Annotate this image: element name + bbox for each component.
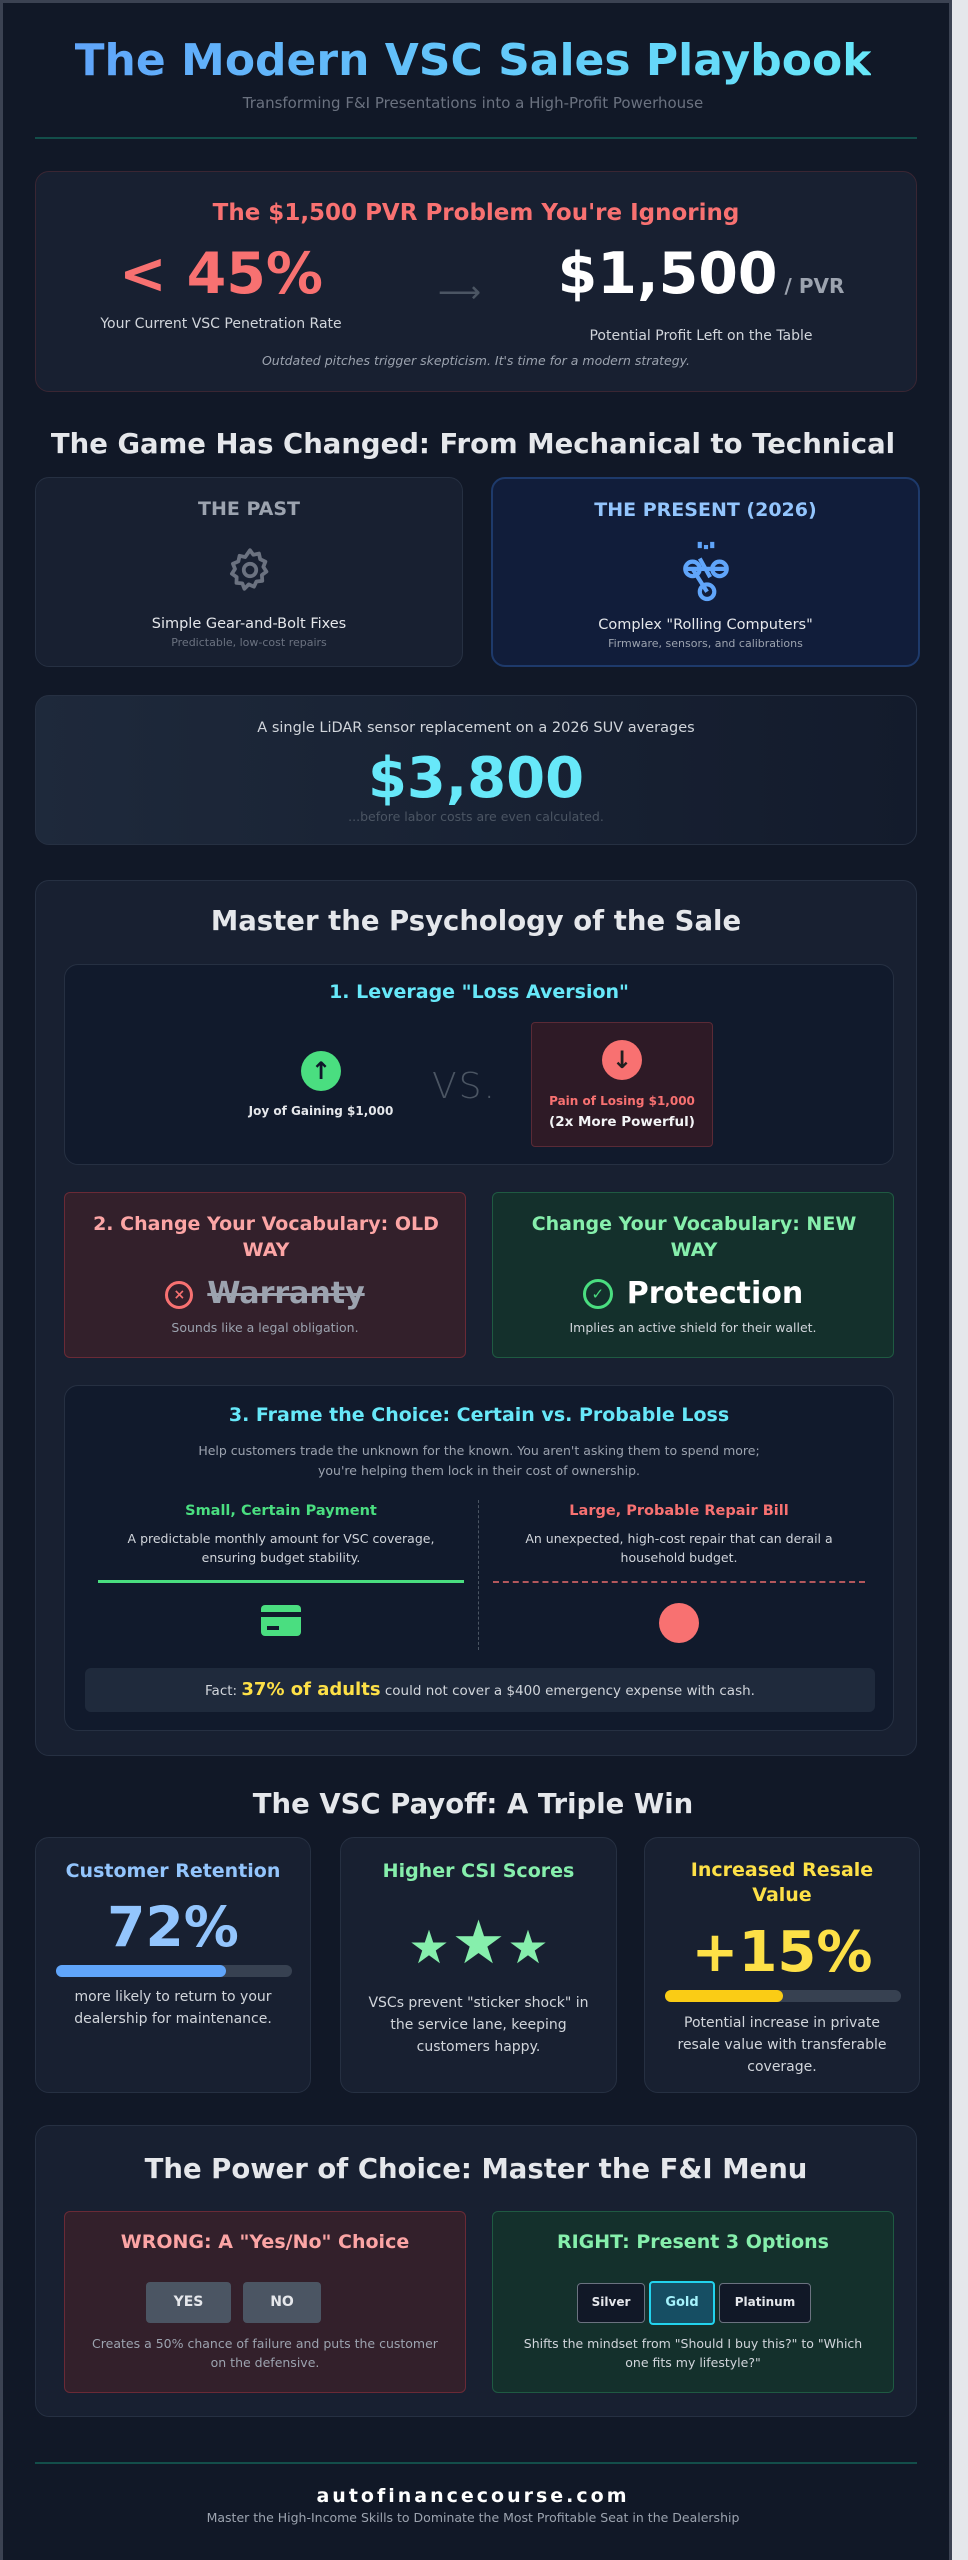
card: resale: coverage. bbox=[747, 2059, 817, 2075]
fact box: Fact: 37% of adults could not cover a $400 emergency expense with cash. bbox=[205, 1679, 755, 1700]
box: frame the choice: you're helping them lock in their cost of ownership. bbox=[318, 1463, 640, 1478]
box: pain bbox=[531, 1022, 713, 1147]
fact box bbox=[85, 1668, 875, 1712]
column: repair bill bbox=[493, 1503, 865, 1643]
icon: stars: ★★★ bbox=[408, 1908, 549, 1978]
icon: card bbox=[261, 1605, 301, 1636]
box: old way: Warranty bbox=[207, 1276, 365, 1311]
panel: LiDAR cost: A single LiDAR sensor replacement on a 2026 SUV averages bbox=[257, 720, 695, 736]
box: wrong: YES bbox=[174, 2294, 203, 2310]
box: old way: WAY bbox=[243, 1239, 289, 1261]
vs: VS. bbox=[432, 1066, 497, 1107]
box: frame the choice: Help customers trade the unknown for the known. You aren't asking them to spend more; bbox=[198, 1443, 760, 1458]
icon: gain: ↑ bbox=[311, 1057, 331, 1085]
stat: penetration bbox=[100, 241, 342, 332]
box: new way: Implies an active shield for their wallet. bbox=[569, 1320, 817, 1335]
note: Outdated pitches trigger skepticism. It's time for a modern strategy. bbox=[262, 353, 690, 368]
box: wrong: on the defensive. bbox=[211, 2355, 319, 2370]
panel: power of choice: The Power of Choice: Master the F&I Menu bbox=[145, 2153, 807, 2185]
heading: game has changed: The Game Has Changed: From Mechanical to Technical bbox=[51, 428, 895, 460]
stat: penetration: < 45% bbox=[119, 241, 323, 307]
box: old way: Sounds like a legal obligation. bbox=[171, 1320, 359, 1335]
title: The Modern VSC Sales Playbook bbox=[75, 35, 871, 86]
card: resale bbox=[644, 1837, 920, 2093]
column: certain payment: ensuring budget stability. bbox=[202, 1550, 360, 1565]
box: new way: Change Your Vocabulary: NEW bbox=[532, 1213, 856, 1235]
box: old way bbox=[64, 1192, 466, 1358]
text: Master the High-Income Skills to Dominate the Most Profitable Seat in the Dealership bbox=[207, 2510, 739, 2525]
box: frame the choice: 3. Frame the Choice: Certain vs. Probable Loss bbox=[229, 1404, 729, 1426]
panel: the present bbox=[491, 477, 920, 667]
box: loss aversion: 1. Leverage "Loss Aversion" bbox=[329, 981, 629, 1003]
box: new way bbox=[492, 1192, 894, 1358]
box: right: Shifts the mindset from "Should I buy this?" to "Which bbox=[524, 2336, 862, 2351]
box: pain: (2x More Powerful) bbox=[549, 1114, 695, 1130]
card: retention bbox=[35, 1837, 311, 2093]
card: CSI: Higher CSI Scores bbox=[383, 1860, 574, 1882]
panel: power of choice bbox=[35, 2125, 917, 2417]
stat: penetration: Your Current VSC Penetration Rate bbox=[100, 316, 342, 332]
heading: PVR problem: The $1,500 PVR Problem You're Ignoring bbox=[213, 200, 739, 226]
panel: the present: Complex "Rolling Computers" bbox=[598, 617, 813, 633]
card: resale: Value bbox=[752, 1884, 812, 1906]
box: right: Gold bbox=[665, 2295, 699, 2310]
box: new way: WAY bbox=[671, 1239, 717, 1261]
card: resale: Potential increase in private bbox=[684, 2015, 880, 2031]
panel: LiDAR cost bbox=[35, 695, 917, 845]
box: right: Silver bbox=[592, 2295, 630, 2309]
panel: the past bbox=[35, 477, 463, 667]
column: certain payment: A predictable monthly amount for VSC coverage, bbox=[128, 1531, 434, 1546]
stat: profit: $1,500 / PVR bbox=[558, 241, 844, 307]
card: CSI: customers happy. bbox=[417, 2039, 540, 2055]
icon: gear bbox=[230, 548, 268, 591]
box: wrong: NO bbox=[270, 2294, 294, 2310]
panel: LiDAR cost: ...before labor costs are even calculated. bbox=[348, 809, 604, 824]
card: retention: dealership for maintenance. bbox=[74, 2011, 272, 2027]
box: wrong: Creates a 50% chance of failure and puts the customer bbox=[92, 2336, 438, 2351]
subtitle: Transforming F&I Presentations into a High-Profit Powerhouse bbox=[243, 94, 703, 112]
box: wrong bbox=[64, 2211, 466, 2393]
panel: the past: Predictable, low-cost repairs bbox=[171, 636, 327, 649]
box: right: RIGHT: Present 3 Options bbox=[557, 2231, 829, 2253]
column: repair bill: Large, Probable Repair Bill bbox=[569, 1503, 789, 1519]
box: pain: Pain of Losing $1,000 bbox=[549, 1094, 695, 1108]
column: certain payment: Small, Certain Payment bbox=[185, 1503, 377, 1519]
stat: profit: Potential Profit Left on the Table bbox=[589, 328, 813, 344]
panel: the past: Simple Gear-and-Bolt Fixes bbox=[152, 616, 346, 632]
card: resale: resale value with transferable bbox=[678, 2037, 886, 2053]
box: old way: × bbox=[173, 1287, 185, 1303]
panel: the present: THE PRESENT (2026) bbox=[594, 499, 817, 521]
column: certain payment bbox=[98, 1503, 464, 1636]
icon: circuit bbox=[683, 542, 729, 602]
card: retention: Customer Retention bbox=[66, 1860, 280, 1882]
panel: the present: Firmware, sensors, and calibrations bbox=[608, 637, 803, 650]
card: resale: +15% bbox=[692, 1920, 872, 1985]
box: right bbox=[492, 2211, 894, 2393]
arrow: ⟶ bbox=[438, 275, 481, 310]
column: repair bill: household budget. bbox=[621, 1550, 737, 1565]
card: retention: 72% bbox=[107, 1895, 239, 1959]
box: frame the choice bbox=[64, 1385, 894, 1731]
stat: profit bbox=[558, 241, 844, 344]
box: loss aversion bbox=[64, 964, 894, 1165]
panel: the past: THE PAST bbox=[198, 498, 300, 520]
box: loss aversion: Joy of Gaining $1,000 bbox=[249, 1104, 393, 1118]
heading: psychology: Master the Psychology of the Sale bbox=[211, 905, 741, 937]
card: retention: more likely to return to your bbox=[74, 1989, 272, 2005]
card: CSI bbox=[340, 1837, 617, 2093]
box: new way: Protection bbox=[627, 1276, 803, 1311]
card: resale: Increased Resale bbox=[691, 1859, 873, 1881]
box: new way: ✓ bbox=[591, 1285, 604, 1303]
column: repair bill: An unexpected, high-cost repair that can derail a bbox=[525, 1531, 833, 1546]
icon: gain bbox=[301, 1051, 341, 1091]
box: wrong: WRONG: A "Yes/No" Choice bbox=[121, 2231, 409, 2253]
panel: PVR problem bbox=[35, 171, 917, 392]
stat: $3,800: $3,800 bbox=[368, 746, 584, 811]
box: pain: ↓ bbox=[612, 1046, 632, 1074]
icon: red dot bbox=[659, 1603, 699, 1643]
box: old way: 2. Change Your Vocabulary: OLD bbox=[93, 1213, 439, 1235]
card: CSI: the service lane, keeping bbox=[390, 2017, 567, 2033]
box: right: Platinum bbox=[735, 2295, 795, 2309]
card: CSI: VSCs prevent "sticker shock" in bbox=[368, 1995, 589, 2011]
heading: triple win: The VSC Payoff: A Triple Win bbox=[253, 1788, 693, 1820]
box: right: one fits my lifestyle?" bbox=[625, 2355, 761, 2370]
footer: autofinancecourse.com bbox=[316, 2485, 630, 2507]
panel: psychology bbox=[35, 880, 917, 1756]
